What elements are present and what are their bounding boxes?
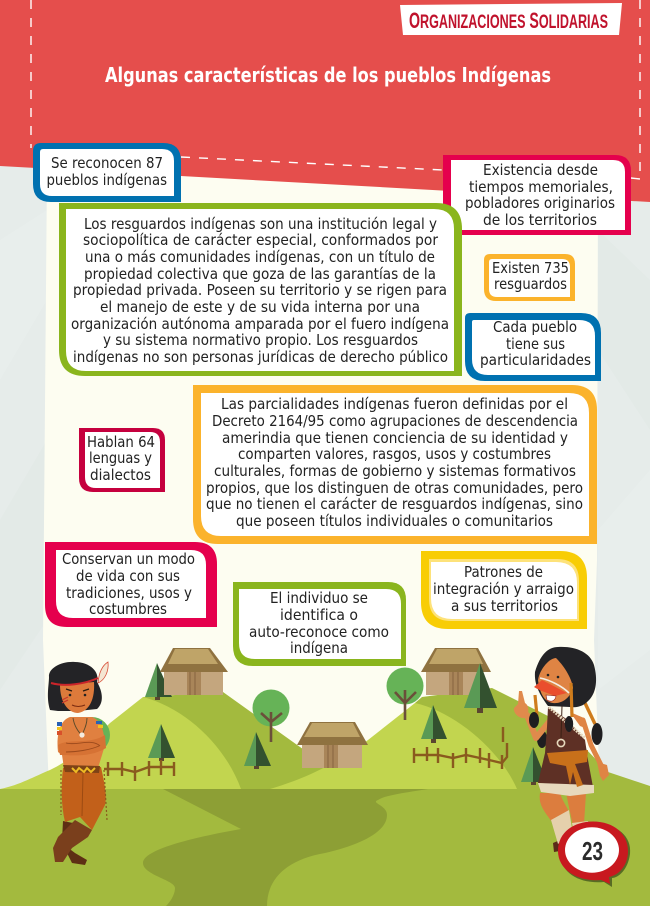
callout: Patrones de integración: Patrones de — [464, 563, 543, 581]
red header band — [0, 0, 650, 202]
belt — [63, 765, 100, 773]
feather — [98, 662, 108, 683]
callout: Conservan un modo de vida: Conservan un modo — [62, 550, 195, 568]
fringe — [538, 783, 594, 796]
panel: parcialidades indígenas: comparten valores, rasgos, usos y costumbres — [238, 445, 551, 463]
panel: parcialidades indígenas — [193, 385, 597, 544]
section label: Organizaciones Solidarias — [400, 3, 622, 35]
character: indigenous woman — [514, 647, 609, 852]
road — [143, 789, 428, 906]
callout: Existen 735 resguardos: Existen 735 — [492, 259, 569, 277]
front braids — [535, 683, 572, 717]
callout: Hablan 64 lenguas y dialectos: Hablan 64 — [87, 433, 155, 451]
callout: Existencia desde tiempos memoriales: Existencia desde — [483, 161, 598, 179]
callout: Conservan un modo de vida: costumbres — [89, 600, 167, 618]
panel: resguardos indígenas: y su sistema normativo propio. Los resguardos — [103, 331, 418, 349]
necklace — [73, 718, 87, 735]
callout: Se reconocen 87 pueblos: pueblos indígenas — [46, 171, 167, 189]
panel: resguardos indígenas: indígenas no son personas jurídicas de derecho público — [73, 348, 448, 366]
callout: Patrones de integración — [421, 551, 587, 629]
panel: resguardos indígenas: organización autónoma amparada por el fuero indígena — [71, 315, 449, 333]
torso — [58, 717, 105, 768]
callout: Existencia desde tiempos memoriales: pobladores originarios — [465, 194, 615, 212]
front boot — [53, 820, 92, 862]
callout: Patrones de integración: a sus territorios — [451, 597, 558, 615]
panel: resguardos indígenas: Los resguardos indígenas son una institución legal y — [84, 215, 437, 233]
title: Algunas características de los pueblos Indígenas — [105, 63, 551, 87]
necklace — [561, 706, 562, 738]
fur boots — [551, 810, 573, 844]
character: indigenous man — [48, 662, 108, 865]
panel: resguardos indígenas: sociopolítica de carácter especial, conformados por — [83, 231, 439, 249]
sash — [547, 750, 588, 787]
callout: El individuo se identifica: identifica o — [280, 606, 358, 624]
callout: Existen 735 resguardos — [484, 254, 575, 301]
headband — [51, 678, 98, 685]
fences — [104, 727, 507, 781]
callout: Existen 735 resguardos: resguardos — [494, 275, 567, 293]
dashed stitching line — [31, 0, 640, 180]
panel: resguardos indígenas: una o más comunidades indígenas, con un título de — [85, 248, 435, 266]
callout: Se reconocen 87 pueblos: Se reconocen 87 — [51, 154, 163, 172]
far hills — [130, 692, 360, 789]
panel: resguardos indígenas: propiedad colectiva que goza de las garantías de la — [84, 265, 436, 283]
light hill right — [270, 703, 517, 789]
callout: El individuo se identifica: El individuo se — [270, 589, 368, 607]
panel: parcialidades indígenas: amerindia que tienen conciencia de su identidad y — [222, 429, 568, 447]
round trees — [74, 668, 424, 753]
tall pine in front of hut — [464, 663, 497, 713]
callout: Cada pueblo tiene sus particularidades: Cada pueblo — [493, 318, 577, 336]
panel: parcialidades indígenas: Decreto 2164/95 como agrupaciones de descendencia — [212, 412, 578, 430]
callout: Hablan 64 lenguas y dialectos: dialectos — [90, 466, 151, 484]
landscape illustration — [0, 648, 650, 906]
pants — [62, 767, 106, 830]
legs — [540, 793, 570, 822]
panel: parcialidades indígenas: Las parcialidades indígenas fueron definidas por el — [221, 395, 568, 413]
crossed arms — [58, 735, 106, 755]
callout: El individuo se identifica — [233, 582, 406, 666]
back boot — [62, 821, 87, 865]
callout: Hablan 64 lenguas y dialectos — [79, 428, 165, 492]
panel: parcialidades indígenas: culturales, formas de gobierno y sistemas formativos — [214, 462, 576, 480]
panel: parcialidades indígenas: que no tienen el carácter de resguardos indígenas, sino — [206, 495, 583, 513]
callout: Conservan un modo de vida: tradiciones, usos y — [66, 584, 192, 602]
panel: resguardos indígenas — [59, 203, 462, 376]
panel: resguardos indígenas: el manejo de este y de su vida interna por una — [100, 298, 420, 316]
callout: Cada pueblo tiene sus particularidades: tiene sus — [506, 335, 565, 353]
hand — [514, 691, 528, 718]
callout: Conservan un modo de vida: de vida con sus — [76, 567, 180, 585]
shoulder — [570, 712, 585, 728]
mask paint — [534, 680, 567, 696]
light hill left — [0, 697, 241, 789]
eyes — [547, 674, 549, 676]
other hand — [597, 762, 609, 781]
page number badge: 23 — [582, 836, 603, 866]
callout: Existencia desde tiempos memoriales: de los territorios — [483, 211, 597, 229]
callout: Existencia desde tiempos memoriales: tiempos memoriales, — [469, 178, 613, 196]
ground — [0, 789, 650, 906]
other arm — [583, 720, 601, 765]
back braid tufts — [537, 730, 547, 748]
face — [60, 682, 94, 713]
callout: El individuo se identifica: auto-reconoce como — [249, 623, 389, 641]
cream page panel — [43, 170, 600, 790]
collar — [549, 707, 585, 738]
callout: Cada pueblo tiene sus particularidades — [465, 313, 601, 381]
panel: resguardos indígenas: propiedad privada. Poseen su territorio y se rigen para — [73, 281, 447, 299]
callout: Cada pueblo tiene sus particularidades: particularidades — [480, 351, 591, 369]
mouth — [546, 695, 556, 701]
callout: Conservan un modo de vida — [45, 542, 217, 627]
callout: Patrones de integración: integración y arraigo — [433, 580, 574, 598]
page number badge — [558, 822, 630, 887]
hair — [535, 647, 596, 707]
shoes — [553, 838, 566, 852]
pine trees — [145, 663, 547, 785]
dress — [538, 707, 593, 787]
pointing arm — [527, 715, 549, 738]
callout: Existencia desde tiempos memoriales — [443, 155, 631, 235]
shoulder paint — [57, 722, 62, 726]
hair — [48, 662, 102, 711]
panel: parcialidades indígenas: que poseen títulos individuales o comunitarios — [236, 512, 553, 530]
callout: El individuo se identifica: indígena — [290, 639, 348, 657]
section label: Organizaciones Solidarias: ORGANIZACIONES SOLIDARIAS — [409, 8, 608, 33]
face — [538, 658, 573, 703]
panel: parcialidades indígenas: propios, que los distinguen de otras comunidades, pero — [206, 479, 583, 497]
callout: Hablan 64 lenguas y dialectos: lenguas y — [89, 449, 152, 467]
facial features — [66, 689, 89, 691]
huts — [160, 648, 491, 768]
callout: Se reconocen 87 pueblos — [33, 143, 181, 202]
